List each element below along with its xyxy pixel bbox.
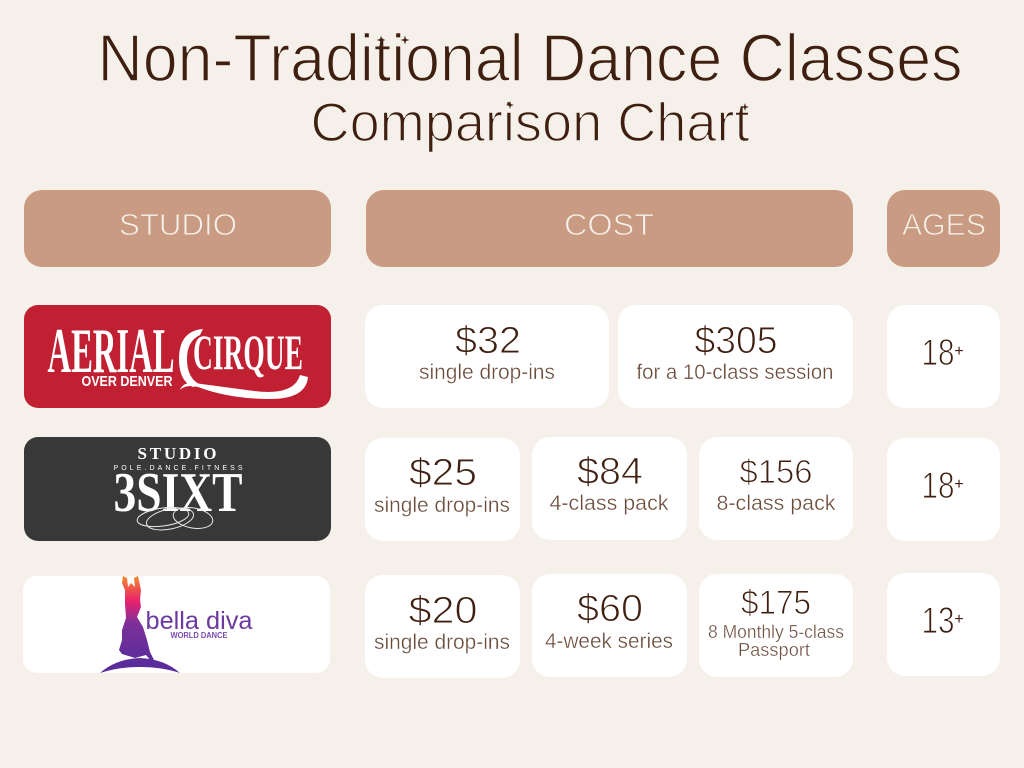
- logo: Bella Diva World Dance: WORLD DANCE: [170, 631, 228, 640]
- cost: $84: 4-class pack: [550, 492, 669, 515]
- cost: $20: [365, 575, 520, 678]
- cost: $84: $84: [577, 451, 643, 493]
- logo: Aerial Cirque over Denver: AERIAL: [48, 315, 174, 386]
- cost: $32: [365, 305, 609, 408]
- cost: $305: [618, 305, 853, 408]
- cost: $156: [699, 437, 853, 540]
- header: studio: [24, 190, 331, 267]
- cost: $60: $60: [577, 588, 643, 630]
- cost: $32: single drop-ins: [419, 361, 555, 384]
- logo: Aerial Cirque over Denver: [24, 305, 331, 408]
- cost: $175: [699, 574, 853, 677]
- logo: Studio 3SIXT: 3SIXT: [114, 462, 242, 524]
- cost: $156: $156: [740, 453, 812, 490]
- header: cost: [366, 190, 853, 267]
- logo: Bella Diva World Dance: [23, 576, 330, 673]
- header: ages: AGES: [902, 207, 986, 242]
- ages: 18+: 18: [922, 332, 954, 373]
- ages: 18+: +: [954, 476, 964, 493]
- cost: $175: 8 Monthly 5-class: [708, 622, 844, 642]
- cost: $25: $25: [409, 452, 477, 494]
- cost: $25: [365, 438, 520, 541]
- ages: 13+: +: [954, 611, 964, 628]
- ages: 13+: 13: [922, 600, 954, 641]
- logo: Studio 3SIXT: POLE.DANCE.FITNESS: [114, 465, 243, 472]
- header: studio: STUDIO: [119, 207, 237, 242]
- cost: $60: [532, 574, 687, 677]
- cost: $20: single drop-ins: [374, 631, 510, 654]
- cost: $305: $305: [694, 320, 778, 362]
- logo: Bella Diva World Dance: bella diva: [146, 607, 253, 635]
- cost: $60: 4-week series: [545, 630, 673, 653]
- cost: $84: [532, 437, 687, 540]
- title: Non-Traditional Dance Classes: [98, 21, 962, 96]
- cost: $175: $175: [741, 584, 811, 622]
- header: cost: COST: [564, 207, 654, 242]
- cost: $175: Passport: [738, 640, 810, 660]
- cost: $32: $32: [455, 320, 521, 362]
- ages: 13+: [887, 573, 1000, 676]
- ages: 18+: +: [954, 343, 964, 360]
- header: ages: [887, 190, 1000, 267]
- subtitle: Comparison Chart: [310, 91, 750, 153]
- logo: Aerial Cirque over Denver: OVER DENVER: [82, 373, 173, 390]
- cost: $156: 8-class pack: [716, 492, 836, 515]
- ages: 18+: [887, 438, 1000, 541]
- cost: $305: for a 10-class session: [636, 361, 834, 384]
- cost: $20: $20: [408, 590, 478, 632]
- logo: Studio 3SIXT: STUDIO: [138, 444, 216, 463]
- cost: $25: single drop-ins: [374, 494, 510, 517]
- ages: 18+: 18: [922, 465, 954, 506]
- logo: Studio 3SIXT: [24, 437, 331, 541]
- ages: 18+: [887, 305, 1000, 408]
- logo: Aerial Cirque over Denver: CIRQUE: [193, 324, 303, 380]
